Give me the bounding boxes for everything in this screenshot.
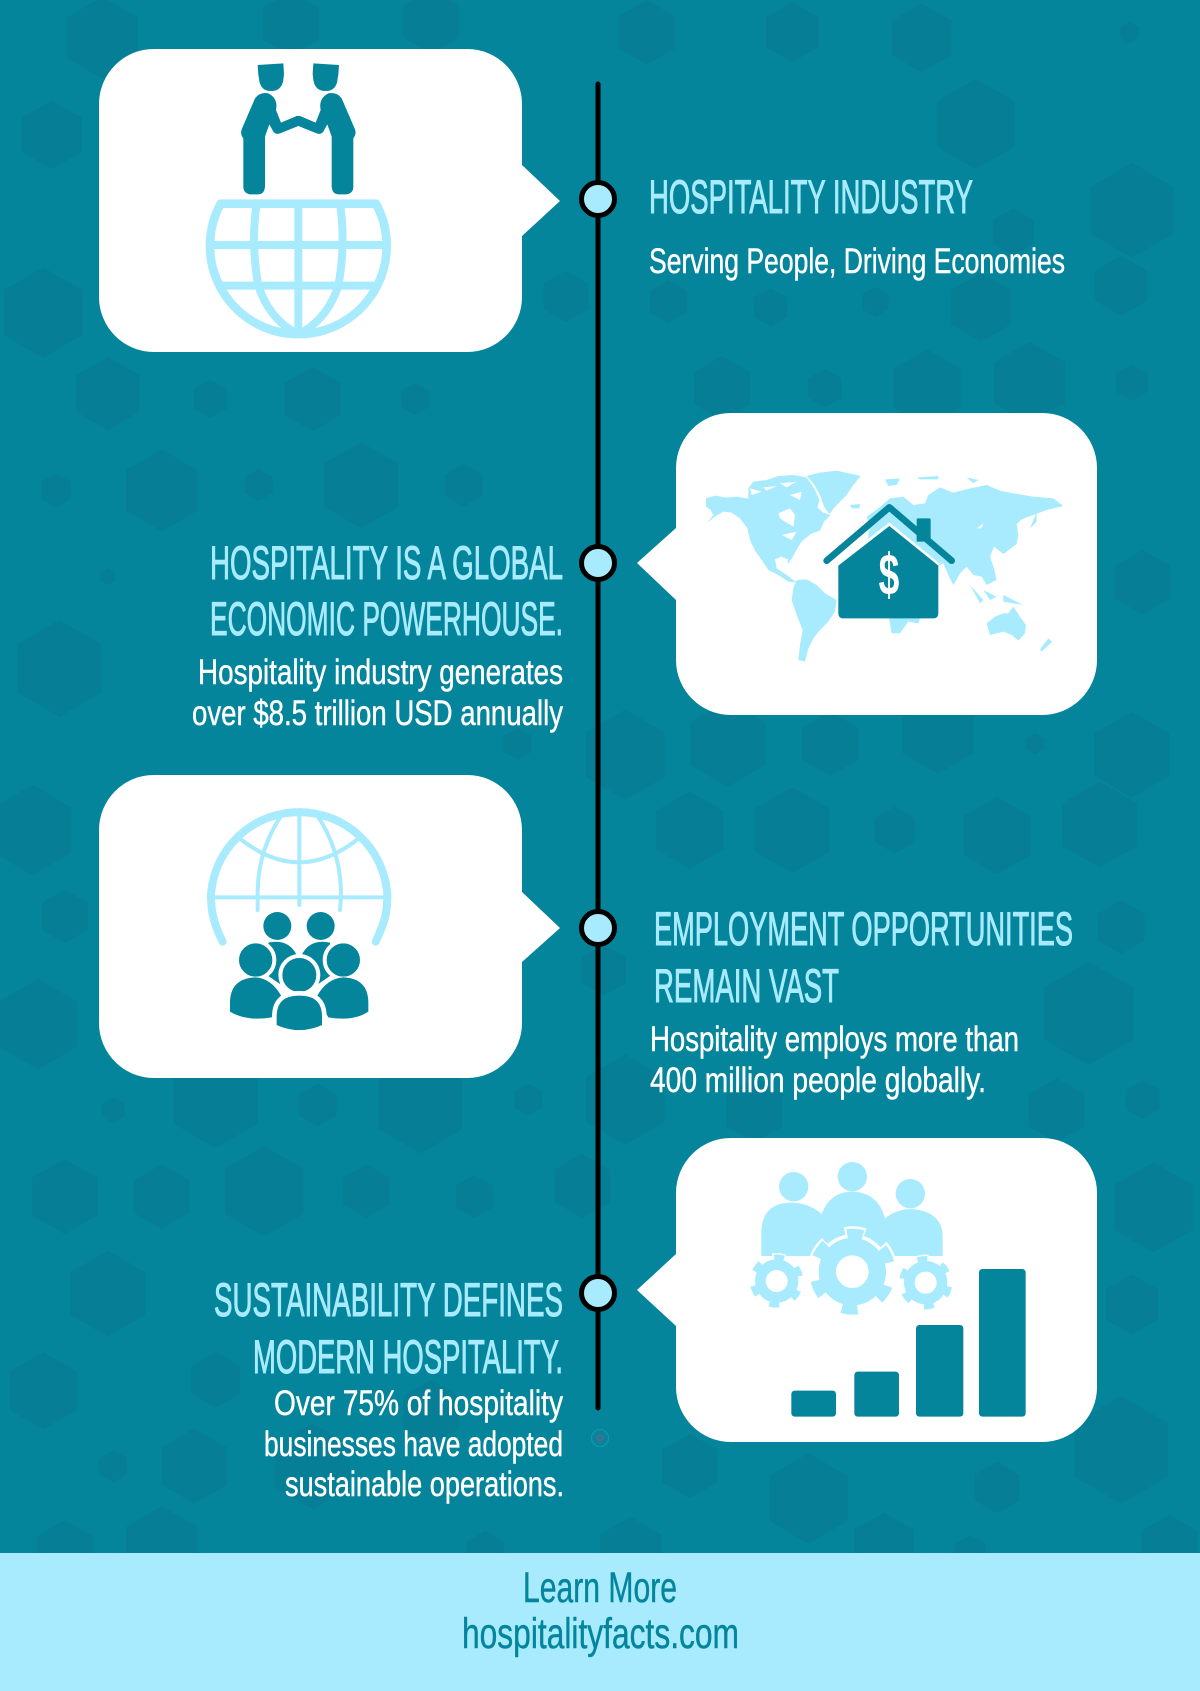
footer: Learn More [523,1564,677,1612]
text block: sustainability: sustainable operations. [285,1465,564,1504]
text block: employment opportunities: REMAIN VAST [654,959,839,1012]
panel: global economy [637,413,1097,715]
panel: handshake over globe [99,49,560,352]
footer: hospitalityfacts.com [462,1610,739,1658]
text block: global economic powerhouse [192,536,563,733]
text block: global economic powerhouse: ECONOMIC POWERHOUSE. [210,592,563,645]
text block: sustainability: Over 75% of hospitality [274,1384,563,1423]
text block: employment opportunities: Hospitality employs more than [650,1020,1019,1059]
icon: people under globe [211,810,387,1032]
text block: sustainability: businesses have adopted [264,1425,563,1464]
text block: global economic powerhouse: over $8.5 trillion USD annually [192,694,563,733]
icon: team gears and bar chart [745,1162,1026,1417]
text block: hospitality industry: Serving People, Driving Economies [649,242,1065,281]
dollar sign: $ [879,543,899,607]
panel: global workforce [99,775,560,1078]
icon: handshake and globe [210,63,387,334]
text block: global economic powerhouse: Hospitality industry generates [198,653,563,692]
text block: sustainability: SUSTAINABILITY DEFINES [214,1273,563,1326]
text block: global economic powerhouse: HOSPITALITY IS A GLOBAL [210,536,563,589]
text block: sustainability: MODERN HOSPITALITY. [253,1330,563,1383]
timeline line and nodes [582,84,614,1446]
text block: employment opportunities [650,902,1073,1100]
footer [0,1553,1200,1691]
text block: hospitality industry: HOSPITALITY INDUSTRY [649,170,973,223]
text block: hospitality industry [649,170,1065,281]
text block: employment opportunities: 400 million people globally. [650,1061,986,1100]
panel: sustainability [637,1138,1097,1442]
text block: sustainability [214,1273,564,1504]
icon: world map with house and dollar [706,471,1063,662]
